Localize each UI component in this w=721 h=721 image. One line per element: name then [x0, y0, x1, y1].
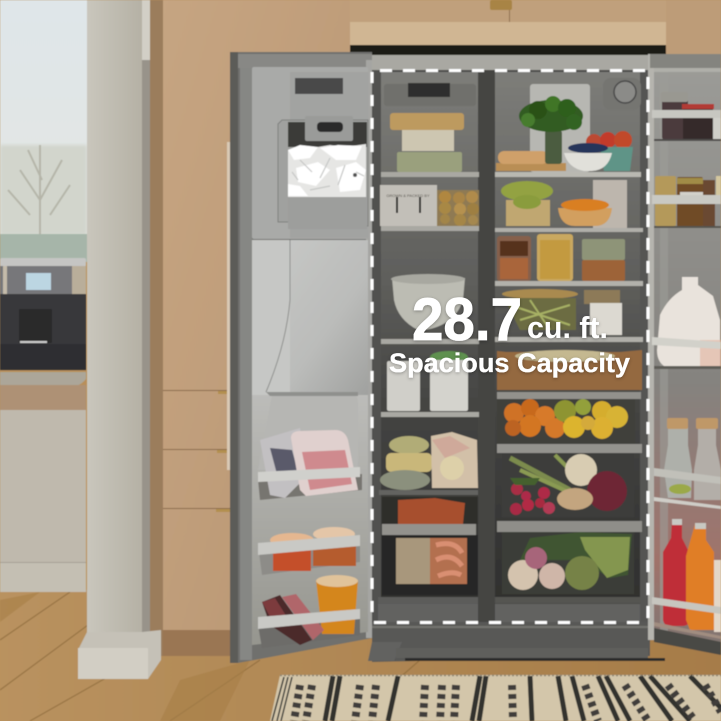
right compartment shelves	[495, 172, 643, 603]
frozen chicken	[431, 432, 478, 488]
kitchen floor	[0, 590, 721, 721]
stainless dispenser panel	[252, 240, 368, 400]
mixing bowl	[392, 278, 465, 330]
coffee machine	[0, 258, 86, 387]
storage jars	[497, 234, 625, 281]
tomatoes	[586, 134, 602, 150]
glass carafes	[654, 418, 721, 509]
cups	[430, 351, 468, 363]
storage boxes	[402, 130, 454, 151]
door liner	[252, 392, 368, 645]
vegetable drawer	[502, 453, 634, 517]
door bin: soup containers	[258, 527, 360, 575]
freezer door	[230, 52, 372, 663]
greens drawer	[502, 532, 634, 594]
column	[78, 0, 161, 679]
orange bowl	[558, 199, 612, 226]
produce box: GROWN & PACKED BY	[386, 193, 430, 198]
green basket	[600, 147, 633, 171]
herbs in vase	[519, 96, 583, 164]
freezer drawer food	[382, 497, 478, 524]
upper cabinets	[350, 0, 721, 57]
door bin: deli cup and steaks	[258, 575, 360, 648]
window view	[0, 0, 87, 262]
tall wood cabinet	[163, 0, 350, 656]
headline: capacity value	[389, 286, 630, 378]
capacity number: 28.7	[412, 286, 522, 353]
lower wall cabinet	[0, 410, 86, 592]
salad in bowl	[502, 289, 578, 330]
right door	[648, 54, 721, 655]
pantry jars	[652, 176, 721, 228]
refrigerator interior	[370, 55, 652, 625]
milk jug	[652, 277, 721, 369]
wood side panel	[149, 0, 163, 656]
grapes	[501, 181, 553, 226]
muffins	[437, 190, 479, 226]
capacity unit: cu. ft.	[527, 310, 608, 345]
right compartment food	[368, 96, 665, 662]
left compartment shelves	[378, 172, 479, 604]
left compartment food	[380, 113, 479, 595]
frozen bread stack	[389, 436, 429, 454]
rug	[270, 675, 721, 721]
pie dish	[390, 113, 464, 130]
fridge base panel	[368, 600, 665, 662]
white dashed capacity outline	[372, 70, 648, 622]
ice cubes	[288, 144, 366, 197]
wooden tray	[497, 350, 642, 390]
ice dispenser housing	[252, 67, 368, 239]
bowl of blueberries	[564, 143, 612, 171]
produce box	[380, 185, 437, 226]
counter	[0, 385, 86, 410]
jam jars	[652, 92, 721, 141]
bread and board	[496, 151, 566, 171]
door bin: frozen bags	[258, 428, 362, 500]
subheading: Spacious Capacity	[389, 348, 630, 378]
juice bottles	[652, 519, 721, 639]
takeout box and jar	[584, 290, 622, 335]
citrus drawer	[497, 399, 635, 444]
